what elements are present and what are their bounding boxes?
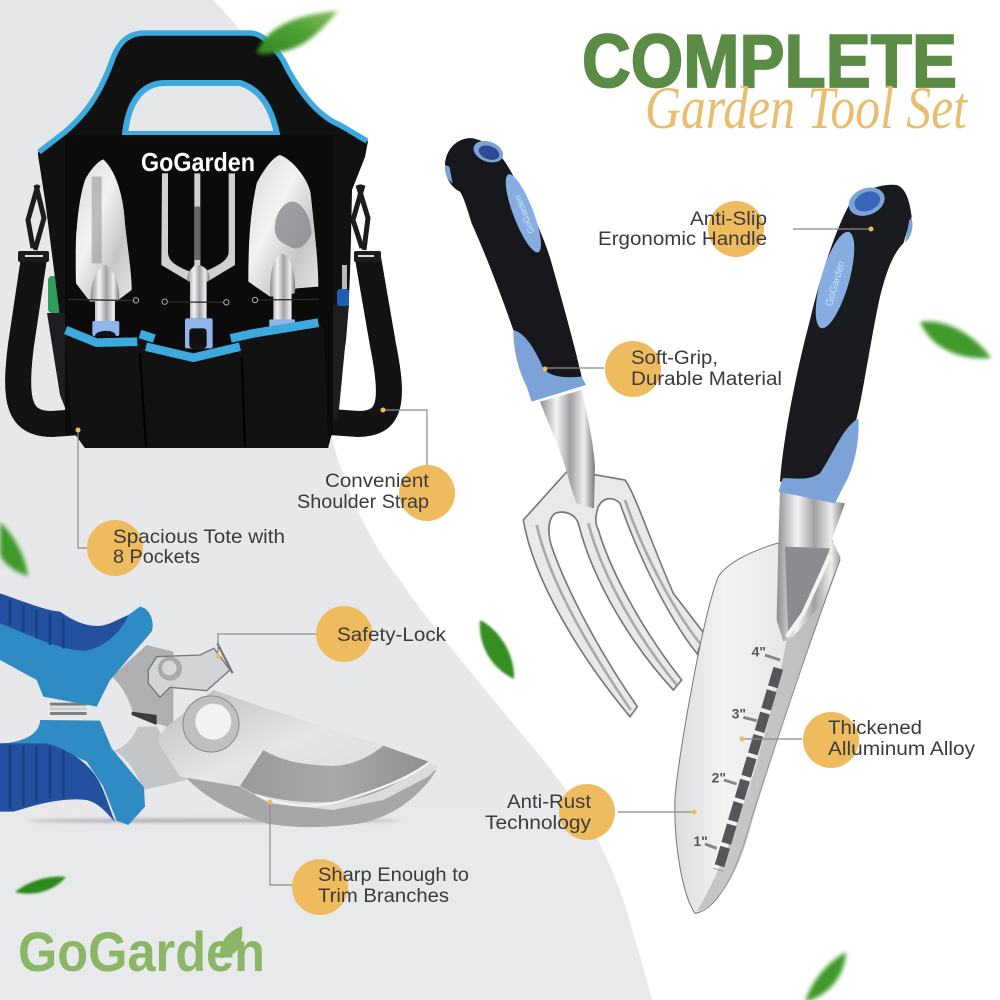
main blade bbox=[157, 690, 438, 810]
hand fork bbox=[445, 137, 704, 717]
callout: soft-grip bbox=[542, 341, 782, 397]
tote bag bbox=[18, 33, 389, 448]
elastic loops bbox=[68, 297, 318, 305]
ruler marks: 1" bbox=[693, 833, 708, 849]
callout: sharp enough: Sharp Enough to bbox=[318, 865, 469, 886]
blade edge highlight bbox=[257, 763, 428, 806]
fork handle grip bbox=[445, 138, 582, 380]
ruler marks bbox=[693, 644, 766, 849]
leaf: lower left bbox=[15, 877, 66, 894]
callout: anti-slip handle bbox=[598, 201, 874, 257]
front pockets bbox=[65, 323, 328, 448]
callout: sharp enough bbox=[268, 800, 469, 915]
upper handle bbox=[0, 607, 153, 707]
ruler marks: 4" bbox=[752, 644, 766, 660]
mini tools and pockets bbox=[65, 155, 328, 448]
blue trim bbox=[39, 33, 367, 152]
callout: safety lock bbox=[216, 606, 447, 662]
callout: anti-rust: Anti-Rust bbox=[507, 792, 592, 813]
leaf: top bbox=[257, 11, 338, 54]
callout: spacious tote bbox=[76, 428, 285, 576]
trowel badge bbox=[808, 228, 862, 332]
lock latch bbox=[217, 643, 233, 673]
callout: convenient shoulder strap: Convenient bbox=[325, 471, 430, 492]
pivot bolt bbox=[183, 696, 239, 752]
callout: convenient shoulder strap bbox=[297, 408, 455, 521]
leaf: left edge bbox=[0, 522, 28, 576]
fork badge bbox=[499, 171, 548, 256]
fork badge: GoGarden bbox=[512, 194, 536, 235]
pocket trim bbox=[66, 323, 318, 358]
ruler marks: 2" bbox=[712, 770, 726, 786]
bag logo: GoGarden bbox=[141, 147, 255, 177]
trowel spine bbox=[777, 492, 845, 642]
trowel collar bbox=[778, 418, 859, 503]
metal back plate bbox=[112, 645, 173, 728]
callout: soft-grip: Durable Material bbox=[631, 369, 782, 390]
callout: spacious tote: Spacious Tote with bbox=[113, 527, 285, 548]
heading: complete: COMPLETE bbox=[582, 19, 957, 103]
brand logo: GoGarden bbox=[18, 920, 265, 983]
callout: thickened alloy bbox=[740, 712, 976, 768]
fork handle bbox=[445, 137, 595, 508]
bag body bbox=[38, 33, 368, 448]
fork collar bbox=[513, 330, 586, 402]
title bbox=[582, 19, 968, 141]
callout: anti-rust: Technology bbox=[485, 813, 592, 834]
upper grip bbox=[0, 593, 128, 651]
logo leaf bbox=[220, 926, 242, 958]
callout: anti-slip handle: Anti-Slip bbox=[690, 209, 767, 230]
lock plate bbox=[148, 648, 230, 697]
mini scoop bbox=[248, 155, 318, 331]
front panel bbox=[65, 135, 333, 435]
leaf: bottom bbox=[805, 952, 846, 1000]
blade side wall bbox=[697, 580, 830, 912]
callout: sharp enough: Trim Branches bbox=[318, 886, 449, 907]
trowel handle bbox=[778, 182, 913, 503]
fork hole bbox=[471, 137, 506, 166]
blade bevel bbox=[240, 746, 428, 802]
fork head bbox=[523, 470, 704, 717]
side clip and blue tool bbox=[337, 265, 349, 306]
callout: convenient shoulder strap: Shoulder Strap bbox=[297, 492, 429, 513]
callout: anti-rust bbox=[485, 784, 696, 840]
trowel badge: GoGarden bbox=[824, 260, 848, 308]
lower handle bbox=[0, 720, 145, 825]
ruler marks: 3" bbox=[732, 705, 746, 721]
floor shadow bbox=[27, 819, 400, 823]
spring bbox=[50, 703, 87, 715]
callout: thickened alloy: Alluminum Alloy bbox=[828, 739, 976, 760]
callout: anti-slip handle: Ergonomic Handle bbox=[598, 229, 767, 250]
trowel hole bbox=[844, 182, 889, 221]
handle opening bbox=[125, 83, 277, 134]
leaf: right bbox=[920, 321, 991, 358]
trowel blade bbox=[675, 492, 845, 913]
leaf: center bbox=[480, 620, 514, 679]
pruning shears bbox=[0, 593, 438, 827]
fork neck bbox=[540, 390, 595, 508]
hand trowel bbox=[675, 182, 913, 913]
rivet bbox=[158, 657, 182, 681]
mini trowel bbox=[76, 159, 132, 336]
lower grip bbox=[0, 743, 115, 822]
lower hooked blade bbox=[185, 770, 437, 827]
ruler strip bbox=[718, 668, 778, 870]
trowel end bump bbox=[905, 218, 913, 243]
callout: soft-grip: Soft-Grip, bbox=[631, 348, 718, 369]
side mesh pockets bbox=[47, 305, 349, 425]
fork end bump bbox=[445, 165, 453, 183]
green rope bbox=[48, 276, 63, 313]
shoulder strap bbox=[18, 185, 389, 424]
callout: spacious tote: 8 Pockets bbox=[113, 547, 200, 568]
spine inset bbox=[785, 547, 830, 637]
mini fork bbox=[161, 173, 235, 348]
callout: safety lock: Safety-Lock bbox=[337, 625, 447, 646]
callout: thickened alloy: Thickened bbox=[828, 718, 922, 739]
